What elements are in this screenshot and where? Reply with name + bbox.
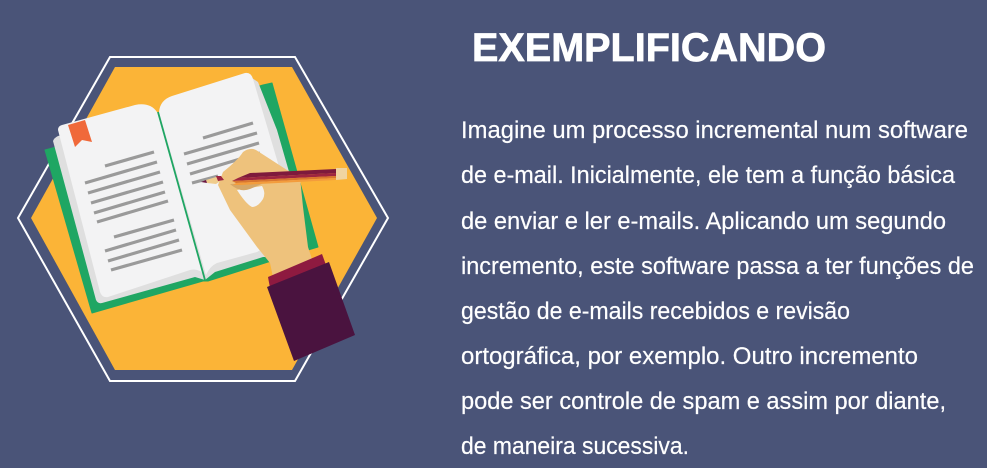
book cover — [45, 83, 318, 313]
body text: pode ser controle de spam e assim por diante, — [461, 388, 946, 415]
shirt cuff — [268, 254, 326, 288]
pencil — [201, 168, 347, 185]
finger knuckle — [216, 176, 224, 181]
body text: Imagine um processo incremental num software — [461, 117, 968, 144]
finger shadow — [230, 183, 264, 190]
text lines: left page — [85, 152, 182, 270]
thumb-gap page — [237, 186, 264, 207]
right page — [159, 73, 295, 275]
body text: ortográfica, por exemplo. Outro incremento — [461, 343, 918, 370]
hexagon: white outline — [18, 57, 388, 381]
body text — [461, 117, 974, 460]
bookmark — [68, 120, 92, 147]
title: EXEMPLIFICANDO — [472, 26, 826, 70]
page stack shadow — [53, 78, 300, 303]
icon: open book — [45, 73, 318, 313]
body text: incremento, este software passa a ter funções de — [461, 253, 974, 280]
body text: gestão de e-mails recebidos e revisão — [461, 298, 850, 325]
hand — [218, 149, 313, 282]
body text: de enviar e ler e-mails. Aplicando um segundo — [461, 208, 946, 235]
book spine — [158, 112, 205, 280]
sleeve — [267, 262, 355, 361]
text lines: right page — [184, 123, 260, 183]
illustration: book and hand in hexagon — [18, 57, 388, 381]
pencil lead — [201, 180, 207, 183]
body text: de e-mail. Inicialmente, ele tem a função básica — [461, 162, 956, 189]
body text: de maneira sucessiva. — [461, 433, 689, 460]
icon: hand holding pencil — [201, 149, 355, 361]
left page — [58, 104, 204, 297]
hexagon: orange fill — [31, 67, 377, 370]
eraser — [336, 168, 347, 180]
pencil tip — [206, 177, 222, 184]
